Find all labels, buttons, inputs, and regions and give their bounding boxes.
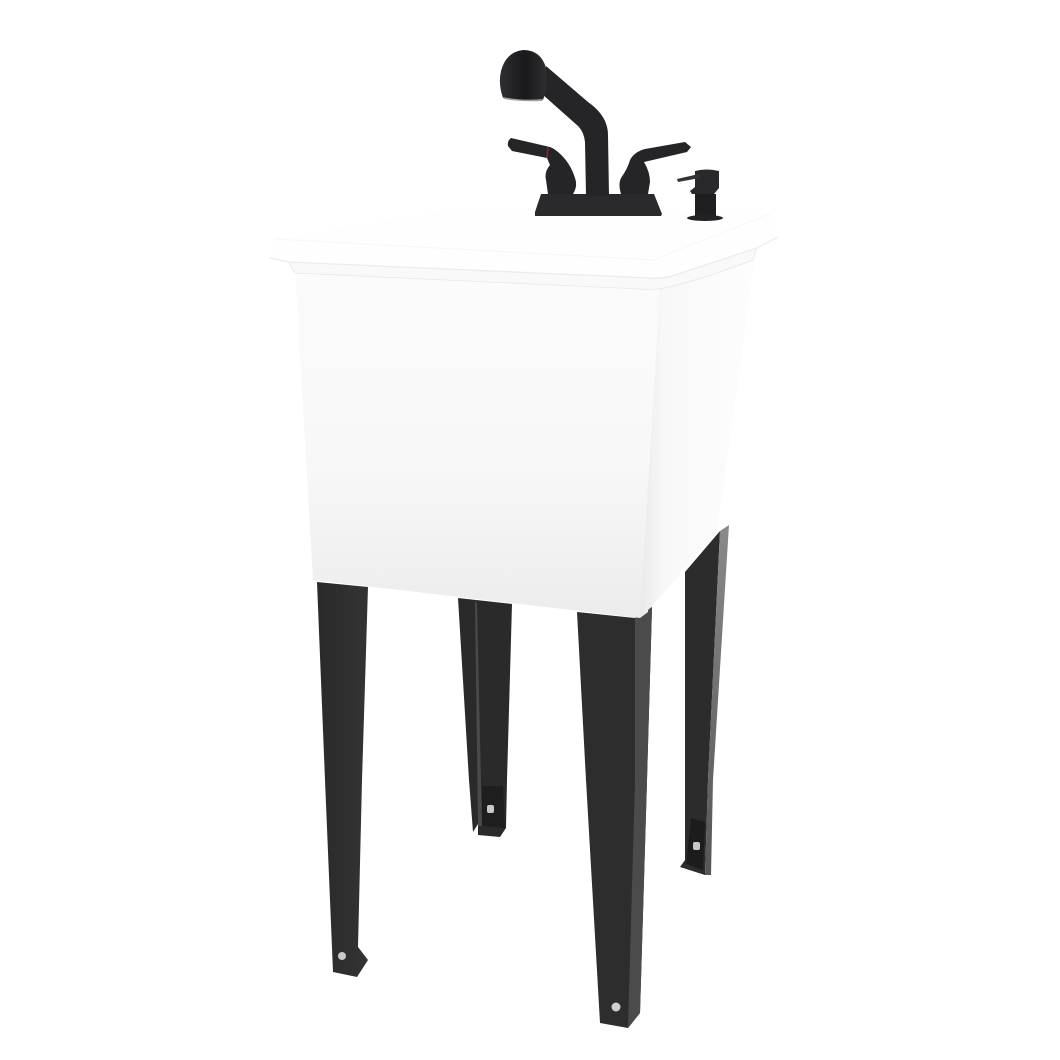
leg: back right bbox=[680, 525, 729, 875]
faucet: right handle bbox=[620, 142, 691, 194]
leg: back left bbox=[458, 598, 512, 837]
dispenser: pump head bbox=[690, 170, 719, 194]
leg: front bbox=[577, 607, 652, 1028]
faucet: pull-out head bbox=[500, 50, 547, 101]
faucet bbox=[500, 50, 723, 221]
faucet: left handle bbox=[508, 138, 576, 194]
faucet: deck plate bbox=[535, 194, 662, 216]
tub: upper band under rim bbox=[288, 248, 757, 289]
tub: front face bbox=[295, 270, 660, 618]
soap dispenser bbox=[677, 170, 723, 221]
tub bbox=[270, 208, 778, 618]
dispenser: neck bbox=[695, 194, 716, 216]
tub: side face bbox=[640, 258, 755, 618]
dispenser: lever bbox=[677, 174, 700, 182]
leg: front left bbox=[317, 582, 368, 977]
dispenser: flange bbox=[687, 215, 723, 221]
faucet: spout bbox=[542, 66, 609, 196]
tub: rim bbox=[270, 208, 778, 278]
